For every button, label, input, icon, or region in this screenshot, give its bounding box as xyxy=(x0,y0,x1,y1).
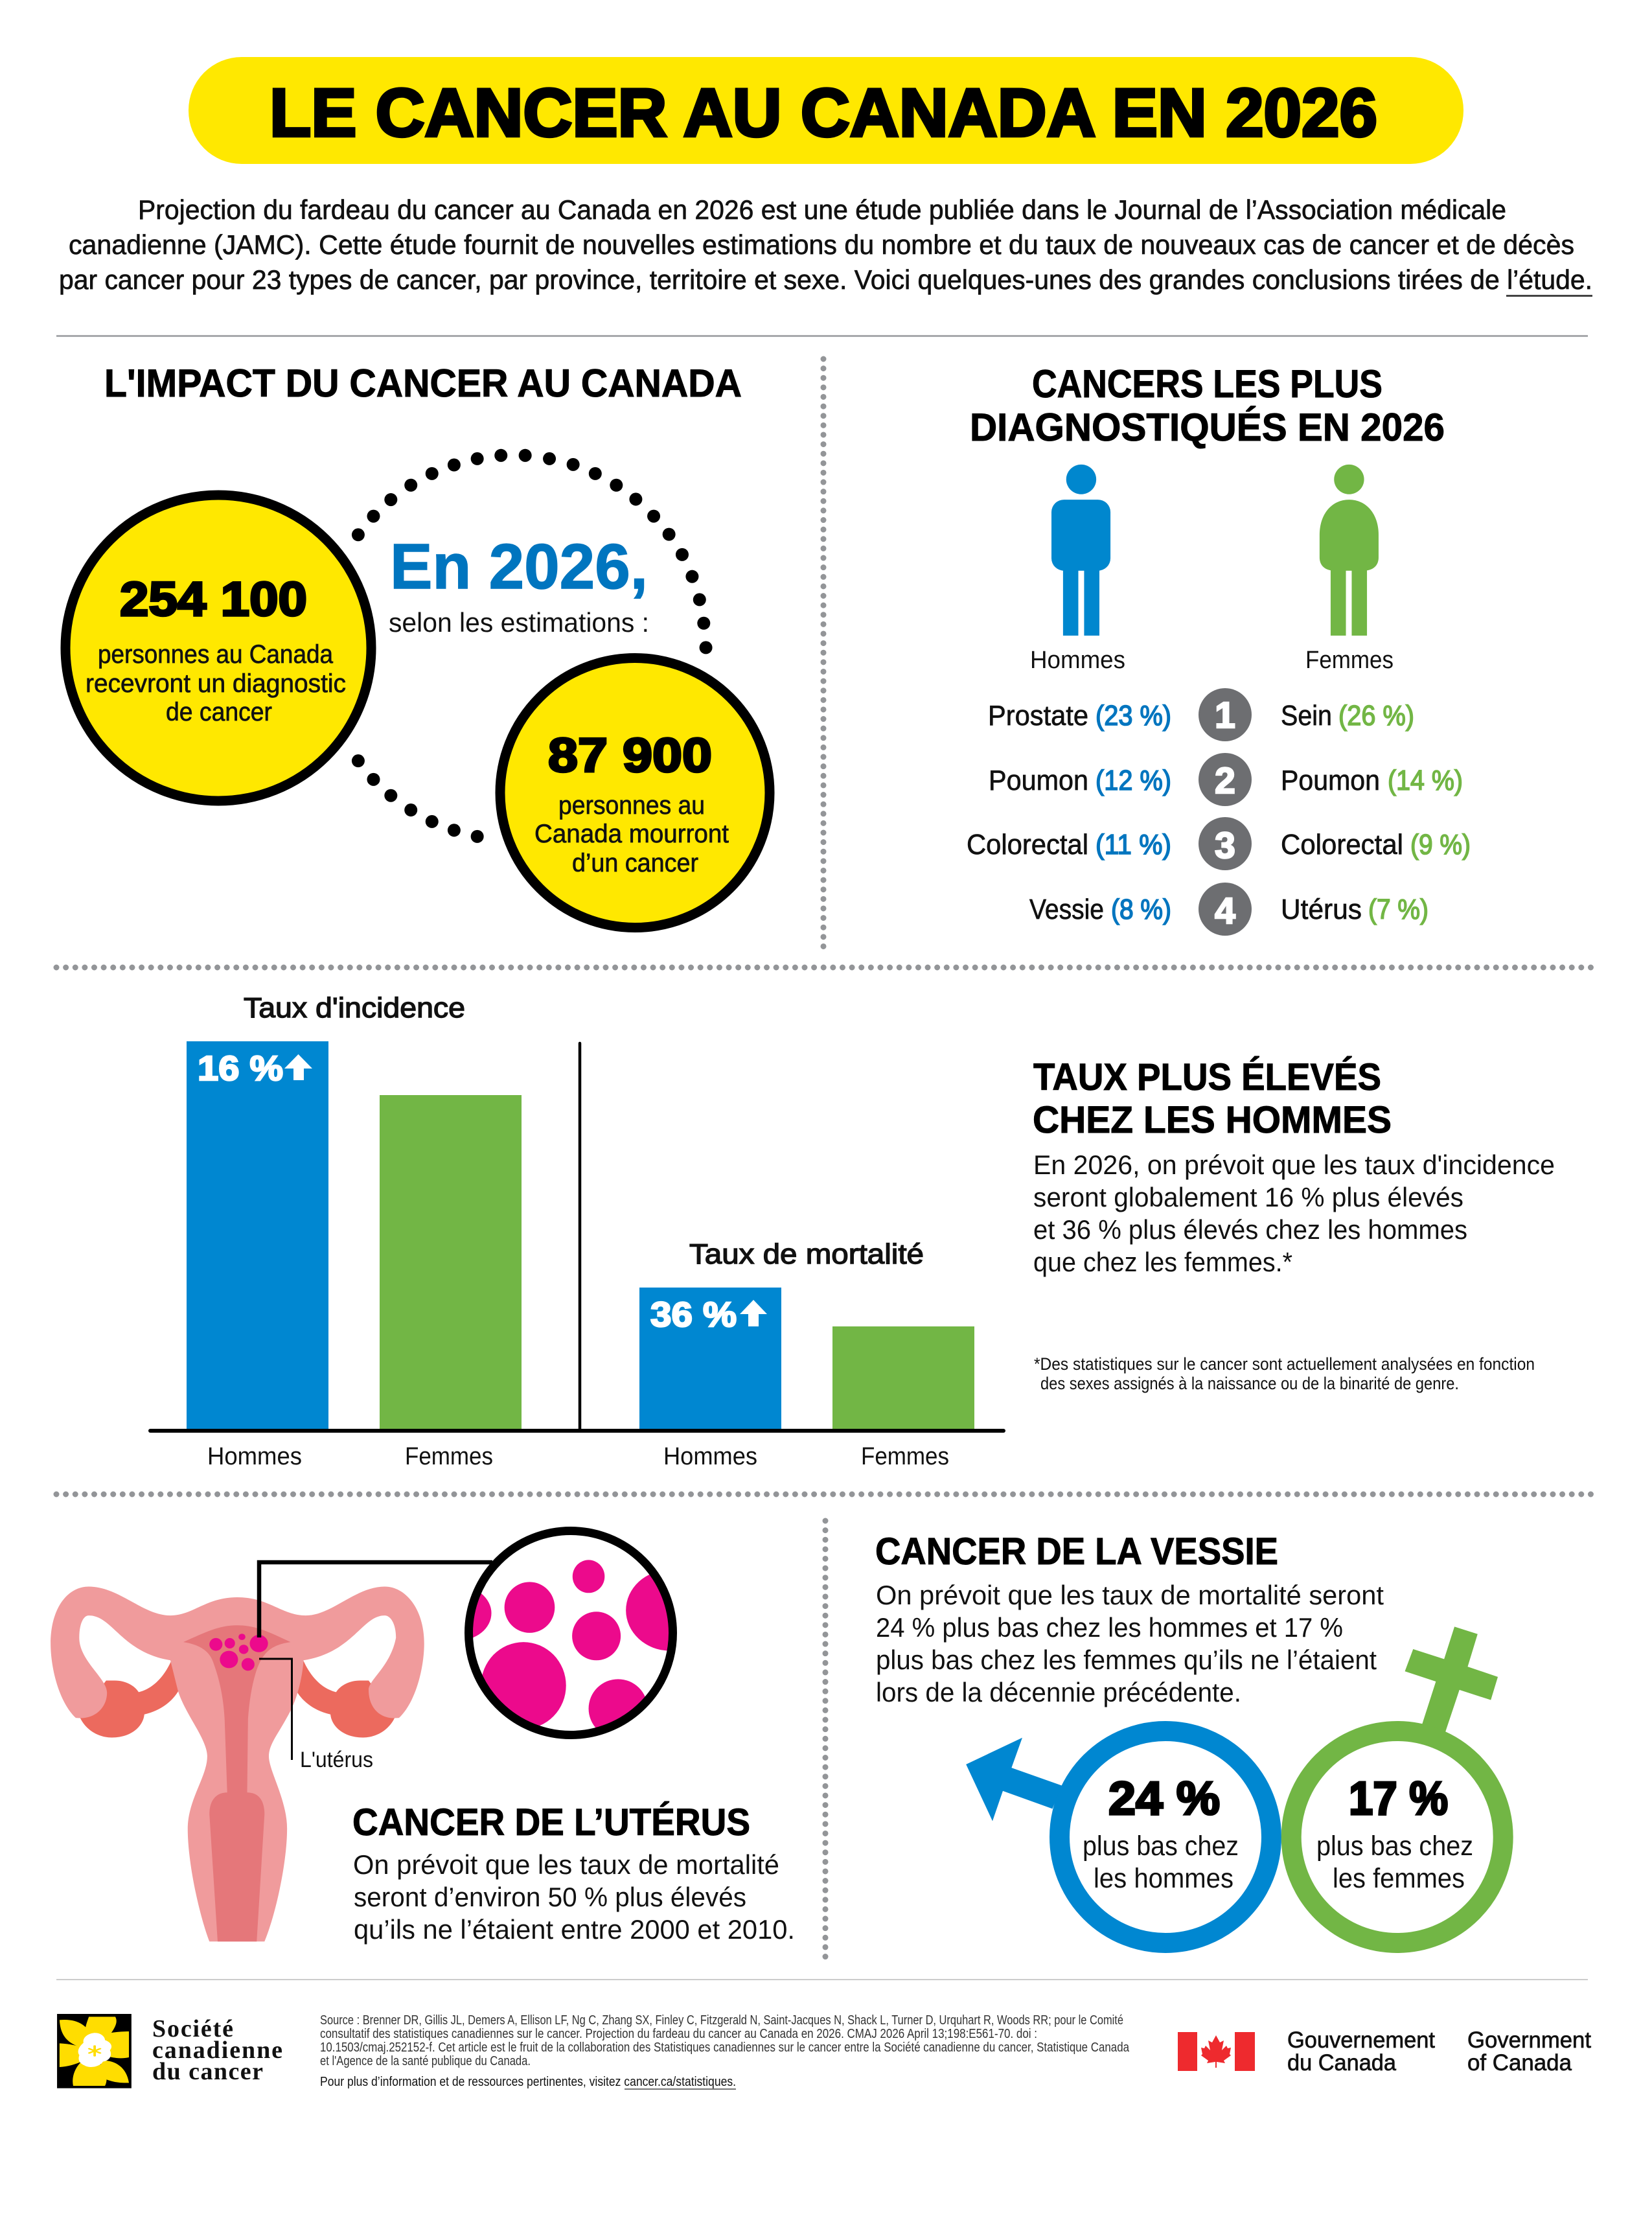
footnote xyxy=(1034,1354,1535,1393)
panel: bladder cancer xyxy=(875,1531,1503,1943)
logo: Canadian Cancer Society: Société xyxy=(152,2015,233,2042)
bar: incidence men xyxy=(187,1041,328,1431)
ranking list: Colorectal xyxy=(1281,829,1403,861)
footnote: des sexes assignés à la naissance ou de la binarité de genre. xyxy=(1040,1374,1459,1393)
callout: uterus label: L'utérus xyxy=(300,1748,373,1772)
icon: man xyxy=(1051,465,1110,636)
intro paragraph: Projection du fardeau du cancer au Canada en 2026 est une étude publiée dans le Journal de l’Association médicale xyxy=(138,194,1506,225)
intro paragraph xyxy=(59,194,1592,297)
axis labels: Hommes xyxy=(663,1443,757,1470)
dotted arcs xyxy=(352,449,713,843)
panel: most diagnosed cancers xyxy=(967,362,1471,936)
axis labels: Femmes xyxy=(405,1443,493,1470)
label: hommes: Hommes xyxy=(1030,647,1125,674)
body text: higher rates: et 36 % plus élevés chez les hommes xyxy=(1033,1214,1467,1245)
heading: most diagnosed: DIAGNOSTIQUÉS EN 2026 xyxy=(970,406,1445,449)
body text: higher rates: En 2026, on prévoit que les taux d'incidence xyxy=(1033,1150,1555,1180)
ranking list: (12 %) xyxy=(1096,765,1171,796)
body text: bladder cancer xyxy=(876,1580,1384,1707)
logo: Government of Canada: Government xyxy=(1467,2028,1591,2053)
body text: uterine cancer: On prévoit que les taux de mortalité xyxy=(353,1849,779,1880)
icon: male symbol: plus bas chez xyxy=(1083,1831,1239,1862)
body text: bladder cancer: lors de la décennie précédente. xyxy=(876,1677,1241,1707)
body text: uterine cancer: seront d’environ 50 % plus élevés xyxy=(354,1882,746,1912)
icon: male symbol xyxy=(966,1731,1271,1943)
ranking list: Poumon xyxy=(1281,765,1380,796)
panel: impact of cancer xyxy=(65,362,770,928)
ranking list: (9 %) xyxy=(1410,829,1471,861)
circle: new diagnoses xyxy=(65,495,371,801)
bar chart: rates xyxy=(150,992,1004,1470)
ranking list: (23 %) xyxy=(1096,700,1171,732)
heading: uterine cancer: CANCER DE L’UTÉRUS xyxy=(352,1801,750,1844)
axis labels: Hommes xyxy=(207,1443,302,1470)
heading: higher rates: TAUX PLUS ÉLEVÉS xyxy=(1033,1056,1381,1098)
body text: bladder cancer: On prévoit que les taux de mortalité seront xyxy=(876,1580,1384,1610)
chart title: incidence: Taux d'incidence xyxy=(244,992,465,1024)
logo: Canadian Cancer Society: canadienne xyxy=(152,2037,282,2064)
source text: 10.1503/cmaj.252152-f. Cet article est le fruit de la collaboration des Statistiques canadiennes sur le cancer entre la Société canadienne du cancer, Statistique Canada xyxy=(320,2040,1130,2055)
circle: deaths: Canada mourront xyxy=(534,820,729,848)
axis labels xyxy=(207,1443,949,1470)
chart title: mortality: Taux de mortalité xyxy=(689,1238,924,1270)
illustration: uterus xyxy=(51,1586,424,1941)
circle: deaths: personnes au xyxy=(558,791,705,820)
source text: Source : Brenner DR, Gillis JL, Demers A, Ellison LF, Ng C, Zhang SX, Finley C, Fitzgerald N, Saint-Jacques N, Shack L, Turner D, Urquhart R, Woods RR; pour le Comité xyxy=(320,2013,1123,2028)
logo: Government of Canada: du Canada xyxy=(1287,2050,1397,2075)
source text: et l'Agence de la santé publique du Canada. xyxy=(320,2054,531,2068)
ranking list: (26 %) xyxy=(1338,700,1414,732)
logo: Canadian Cancer Society xyxy=(57,2014,282,2088)
bar: mortality women xyxy=(832,1326,974,1431)
icon: female symbol xyxy=(1291,1626,1503,1943)
circle: new diagnoses: personnes au Canada xyxy=(98,640,334,669)
callout: en 2026: selon les estimations : xyxy=(389,607,649,638)
ranking list: (14 %) xyxy=(1388,765,1463,796)
heading: impact: L'IMPACT DU CANCER AU CANADA xyxy=(104,362,742,405)
circle: new diagnoses: 254 100 xyxy=(120,572,307,626)
icon: female symbol: les femmes xyxy=(1333,1863,1465,1894)
axis labels: Femmes xyxy=(861,1443,949,1470)
icon: woman xyxy=(1320,465,1379,636)
callout: uterus label xyxy=(259,1659,373,1772)
source text: Pour plus d’information et de ressources pertinentes, visitez cancer.ca/statistiques. xyxy=(320,2075,736,2089)
ranking list: (8 %) xyxy=(1111,894,1171,925)
title banner xyxy=(189,57,1463,164)
ranking list: Poumon xyxy=(989,765,1088,796)
ranking list: 3 xyxy=(1215,825,1235,866)
body text: higher rates: que chez les femmes.* xyxy=(1033,1247,1292,1277)
ranking list: 4 xyxy=(1215,890,1235,932)
icon: male symbol: les hommes xyxy=(1094,1863,1233,1894)
icon: female symbol: 17 % xyxy=(1349,1773,1448,1825)
bar: mortality men: 36 % xyxy=(650,1295,737,1334)
body text: higher rates: seront globalement 16 % plus élevés xyxy=(1033,1182,1463,1212)
circle: deaths xyxy=(500,658,770,928)
icon: male symbol: 24 % xyxy=(1108,1773,1220,1825)
heading: higher rates: CHEZ LES HOMMES xyxy=(1033,1099,1392,1141)
body text: uterine cancer: qu’ils ne l’étaient entre 2000 et 2010. xyxy=(354,1914,795,1945)
label: femmes: Femmes xyxy=(1305,647,1394,674)
bar: mortality men xyxy=(639,1288,781,1431)
ranking list: Prostate xyxy=(988,700,1088,732)
ranking list: 1 xyxy=(1215,695,1235,736)
source text xyxy=(320,2013,1130,2090)
body text: bladder cancer: 24 % plus bas chez les hommes et 17 % xyxy=(876,1612,1343,1643)
heading: most diagnosed xyxy=(970,362,1445,449)
ranking list: (11 %) xyxy=(1096,829,1171,861)
bar: incidence women xyxy=(380,1095,522,1431)
intro paragraph: canadienne (JAMC). Cette étude fournit de nouvelles estimations du nombre et du taux de nouveaux cas de cancer et de décès xyxy=(69,229,1574,260)
heading: bladder cancer: CANCER DE LA VESSIE xyxy=(875,1531,1278,1573)
logo: Canadian Cancer Society: du cancer xyxy=(152,2058,263,2085)
ranking list: Vessie xyxy=(1029,894,1104,925)
callout: en 2026 xyxy=(389,531,649,638)
footnote: *Des statistiques sur le cancer sont actuellement analysées en fonction xyxy=(1034,1354,1535,1374)
intro paragraph: par cancer pour 23 types de cancer, par province, territoire et sexe. Voici quelques-unes des grandes conclusions tirées de l’étude. xyxy=(59,264,1592,295)
ranking list: Utérus xyxy=(1281,894,1362,925)
ranking list: (7 %) xyxy=(1368,894,1428,925)
callout: en 2026: En 2026, xyxy=(390,531,648,602)
heading: most diagnosed: CANCERS LES PLUS xyxy=(1032,362,1382,406)
ranking list: Sein xyxy=(1281,700,1332,732)
logo: Government of Canada: Gouvernement xyxy=(1287,2028,1435,2053)
magnifier: cancer cells xyxy=(259,1531,715,1738)
panel: higher rates in men xyxy=(1033,1056,1555,1393)
circle: deaths: d’un cancer xyxy=(572,849,698,877)
logo: Government of Canada: of Canada xyxy=(1467,2050,1572,2075)
ranking list: Colorectal xyxy=(967,829,1088,861)
title banner: LE CANCER AU CANADA EN 2026 xyxy=(270,75,1377,151)
bar: incidence men: 16 % xyxy=(198,1049,283,1088)
body text: bladder cancer: plus bas chez les femmes qu’ils ne l’étaient xyxy=(876,1645,1377,1675)
circle: new diagnoses: de cancer xyxy=(166,698,272,726)
body text: uterine cancer xyxy=(353,1849,795,1945)
panel: uterine cancer xyxy=(51,1531,795,1945)
logo: Government of Canada xyxy=(1178,2028,1591,2075)
source text: consultatif des statistiques canadiennes sur le cancer. Projection du fardeau du cancer au Canada en 2026. CMAJ 2026 April 13;198:E561-70. doi : xyxy=(320,2027,1037,2041)
heading: higher rates xyxy=(1033,1056,1392,1141)
ranking list xyxy=(967,688,1471,936)
circle: new diagnoses: recevront un diagnostic xyxy=(86,669,346,698)
icon: female symbol: plus bas chez xyxy=(1316,1831,1473,1862)
icon: Canadian flag xyxy=(1178,2032,1255,2071)
body text: higher rates xyxy=(1033,1150,1555,1277)
ranking list: 2 xyxy=(1215,760,1235,802)
circle: deaths: 87 900 xyxy=(548,728,712,782)
